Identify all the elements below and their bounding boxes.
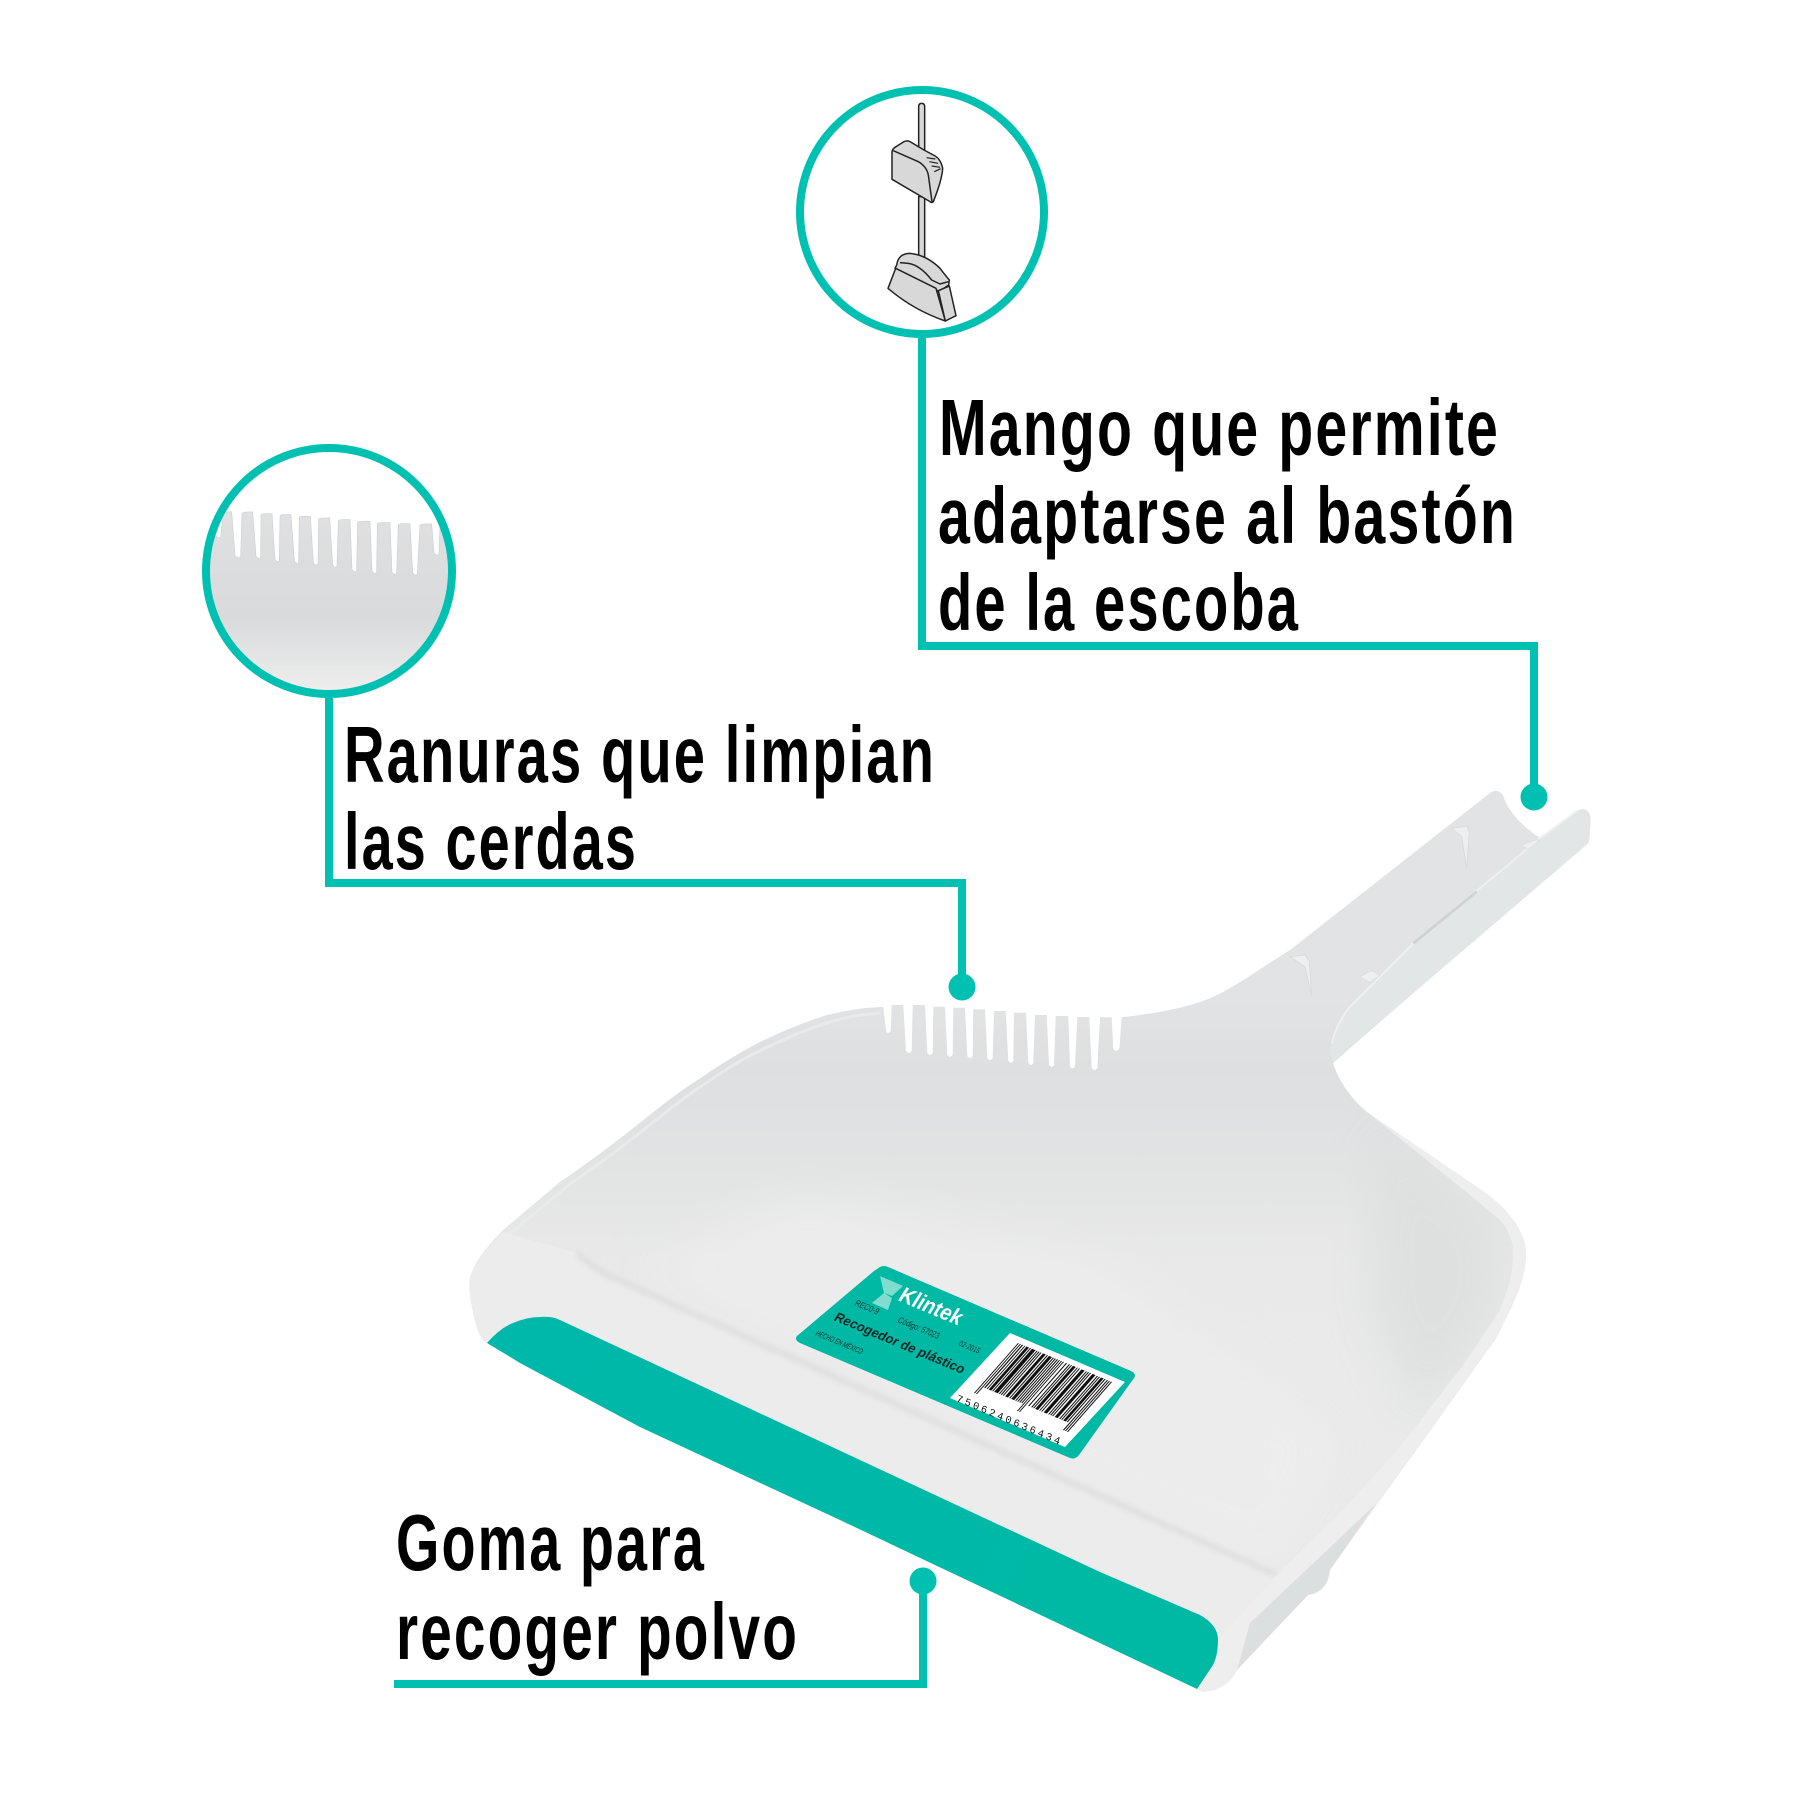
handle side wall	[1330, 810, 1590, 1062]
connector line	[394, 1581, 923, 1684]
connector dot	[910, 1568, 936, 1594]
callout text: las cerdas	[344, 797, 638, 886]
broom bristles	[888, 268, 945, 321]
upper left rim highlight	[478, 1013, 880, 1270]
circle detail of grooves	[210, 511, 448, 690]
broom handle top	[919, 103, 925, 150]
handle rim highlight	[1332, 810, 1578, 1043]
barcode	[974, 1343, 1112, 1432]
dustpan product	[469, 791, 1591, 1692]
front lip	[469, 1232, 1277, 1640]
callout text: de la escoba	[938, 558, 1300, 647]
brand logo	[872, 1276, 903, 1310]
label background	[796, 1266, 1135, 1459]
product name: Recogedor de plástico	[831, 1310, 968, 1376]
callout text: recoger polvo	[396, 1587, 799, 1676]
underside	[1237, 1505, 1375, 1670]
dustpan slots	[927, 158, 941, 172]
crease shadow	[577, 1253, 1277, 1575]
barcode panel	[950, 1333, 1125, 1447]
dustpan crease	[893, 151, 932, 202]
right rim	[1197, 1112, 1526, 1692]
code number: Código: 57023	[896, 1315, 942, 1341]
handle tab lower	[1360, 971, 1380, 983]
handle tab upper	[1522, 840, 1540, 850]
callout text: Mango que permite	[939, 383, 1500, 472]
groove photo	[210, 511, 448, 690]
model code: REC0-9	[853, 1298, 881, 1316]
interior shading	[640, 1130, 1500, 1560]
made in: HECHO EN MÉXICO	[814, 1329, 865, 1356]
callout text: Goma para	[396, 1498, 706, 1587]
callout bottom: rubber	[394, 1498, 936, 1684]
circle outline	[800, 90, 1044, 334]
broom hump	[900, 263, 948, 284]
product label	[796, 1266, 1135, 1459]
callout text: adaptarse al bastón	[938, 471, 1517, 560]
connector dot	[1520, 784, 1548, 810]
callout left: grooves	[200, 448, 975, 1000]
handle rib lower	[1290, 955, 1312, 997]
date: 02-2015	[957, 1339, 982, 1355]
callout text	[938, 383, 1517, 647]
handle slot shadow	[1413, 892, 1477, 943]
circle outline	[206, 448, 452, 694]
broom head top	[895, 253, 949, 292]
brand name: Klintek	[894, 1283, 969, 1329]
handle details	[1290, 810, 1590, 1062]
barcode digits: 7506240636434	[955, 1393, 1061, 1448]
rubber strip	[487, 1317, 1218, 1689]
callout top: handle	[800, 90, 1548, 810]
connector line	[922, 338, 1534, 797]
callout text	[396, 1498, 799, 1676]
dustpan body icon	[892, 141, 943, 202]
connector line	[329, 698, 962, 987]
dustpan body	[469, 791, 1591, 1692]
connector dot	[948, 974, 976, 1000]
icon: dustpan attached to broom	[888, 103, 956, 321]
handle rib upper	[1452, 826, 1469, 868]
broom bristles side	[938, 286, 956, 321]
broom handle lower	[919, 197, 925, 262]
callout text	[344, 710, 936, 886]
callout text: Ranuras que limpian	[344, 710, 936, 799]
